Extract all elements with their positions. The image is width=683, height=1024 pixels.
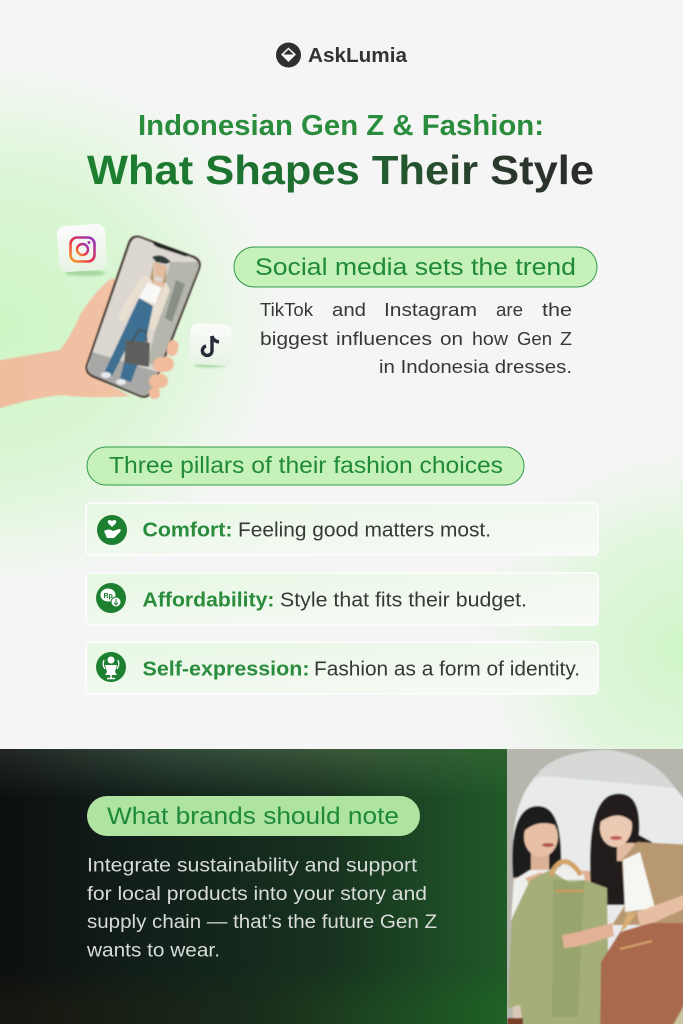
icon: TikTok tile — [189, 323, 232, 368]
row: self-expression — [86, 642, 598, 694]
section: social media — [234, 247, 597, 377]
panel: three pillars — [86, 447, 598, 694]
icon: rupiah coin — [96, 583, 126, 613]
pill heading: Social media — [234, 247, 597, 287]
woman in phone photo — [101, 255, 171, 385]
row: comfort: Feeling good matters most. — [238, 520, 491, 542]
right woman — [590, 794, 683, 925]
pill heading: Social media: Social media sets the trend — [255, 254, 576, 281]
title: What Shapes Their Style — [87, 147, 594, 193]
paragraph: TikTok and Instagram: TikTok — [260, 300, 314, 320]
green jacket — [508, 870, 608, 1024]
paragraph: TikTok and Instagram: influences — [336, 329, 432, 349]
paragraph: TikTok and Instagram: in Indonesia dresses. — [379, 357, 572, 377]
paragraph: TikTok and Instagram: Z — [560, 329, 572, 349]
paragraph: sustainability: wants to wear. — [86, 940, 220, 962]
icon: mannequin — [96, 652, 126, 682]
icon: hand with heart — [97, 515, 127, 545]
row: self-expression: Self-expression: — [142, 658, 310, 680]
left woman — [511, 806, 597, 920]
paragraph: TikTok and Instagram: Gen — [517, 329, 552, 349]
paragraph: TikTok and Instagram: on — [440, 329, 463, 349]
fingers — [149, 339, 180, 399]
paragraph: sustainability: for local products into your story and — [87, 884, 427, 905]
arm and hand — [0, 279, 130, 410]
panel: what brands should note — [0, 749, 507, 1024]
pill heading: Three pillars: Three pillars of their fashion choices — [109, 452, 503, 478]
pill heading: Three pillars — [87, 447, 524, 485]
logo: AskLumia — [276, 42, 408, 68]
illustration: hand holding phone — [0, 223, 232, 410]
row: comfort — [86, 503, 598, 555]
icon: Instagram tile — [56, 223, 108, 276]
paragraph: sustainability: supply chain — that’s the future Gen Z — [87, 912, 437, 933]
logo: AskLumia: AskLumia — [308, 44, 408, 67]
row: affordability: Style that fits their budget. — [280, 590, 527, 612]
brown garment — [600, 923, 683, 1024]
row: affordability: Affordability: — [142, 590, 274, 612]
paragraph: TikTok and Instagram: the — [542, 300, 572, 320]
phone — [80, 235, 205, 400]
paragraph: sustainability: Integrate sustainability and support — [87, 856, 418, 876]
paragraph: TikTok and Instagram: biggest — [260, 329, 328, 349]
pill heading: brands: What brands should note — [107, 803, 399, 830]
paragraph: TikTok and Instagram — [260, 300, 572, 377]
row: self-expression: Fashion as a form of identity. — [314, 658, 580, 680]
pill heading: brands — [87, 796, 420, 836]
paragraph: TikTok and Instagram: are — [496, 300, 523, 320]
row: affordability — [86, 573, 598, 625]
title: Indonesian Gen Z & Fashion: — [138, 110, 544, 142]
paragraph: TikTok and Instagram: Instagram — [384, 300, 477, 320]
row: comfort: Comfort: — [142, 520, 232, 542]
paragraph: TikTok and Instagram: and — [332, 300, 366, 320]
paragraph: sustainability — [86, 856, 437, 962]
paragraph: TikTok and Instagram: how — [472, 329, 509, 349]
title — [87, 110, 594, 193]
icon: rupiah coin: Rp — [104, 593, 113, 600]
photo: two women holding garments — [507, 749, 683, 1024]
